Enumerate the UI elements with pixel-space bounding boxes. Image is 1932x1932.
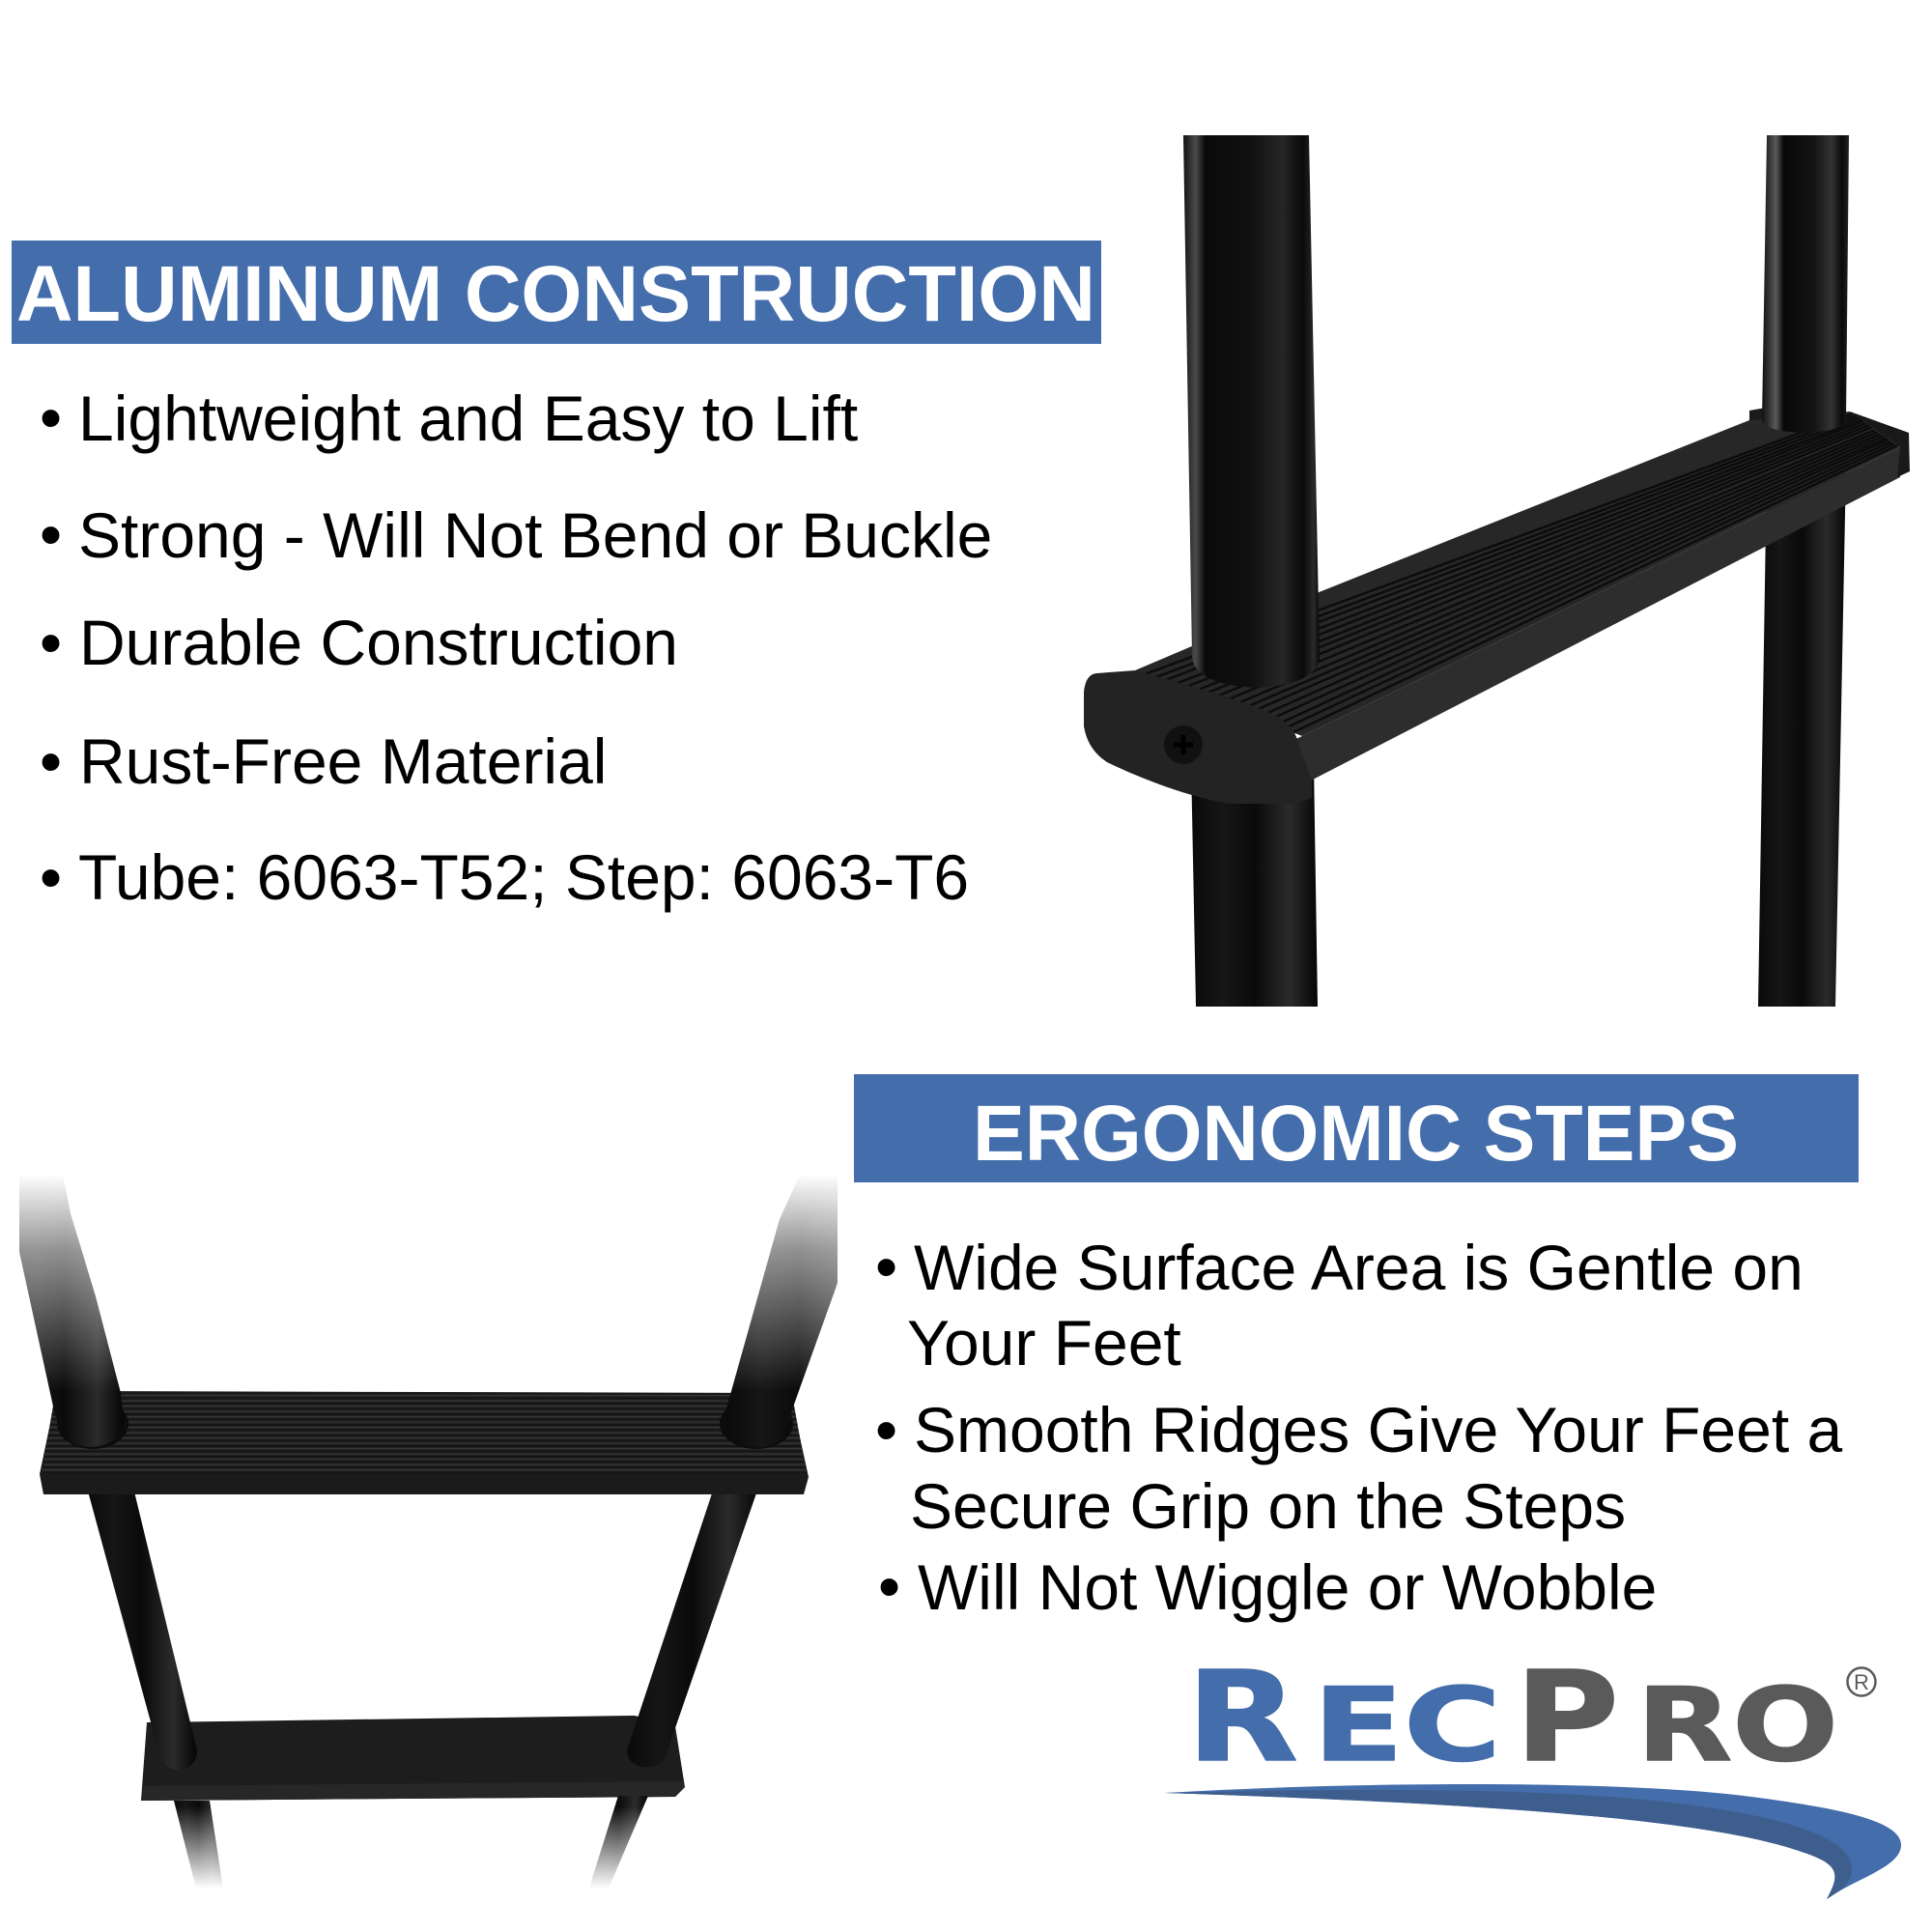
bullet list: aluminum features (40, 382, 992, 913)
registered mark (1847, 1667, 1876, 1696)
bullet list: step features: Will Not Wiggle or Wobble (918, 1551, 1657, 1623)
step tread (1135, 408, 1910, 787)
lower step (141, 1716, 685, 1801)
heading: ergonomic steps (854, 1074, 1859, 1182)
bullet list: aluminum features: • (40, 841, 62, 913)
upper left tube (1183, 135, 1320, 688)
heading: ergonomic steps: ERGONOMIC STEPS (973, 1090, 1739, 1178)
logo wordmark: R (1186, 1645, 1298, 1790)
panel: ergonomic steps (854, 1074, 1859, 1623)
logo swoosh (1165, 1784, 1901, 1899)
panel: aluminum construction (12, 241, 1101, 913)
bullet list: step features: • (878, 1550, 900, 1622)
bullet list: aluminum features: Strong - Will Not Bend or Buckle (78, 499, 992, 571)
bullet list: step features: Your Feet (907, 1307, 1181, 1378)
bullet list: step features: • (875, 1394, 897, 1465)
bullet list: aluminum features: • (40, 725, 62, 797)
logo wordmark (1186, 1645, 1838, 1790)
fading upper rails (19, 1179, 838, 1447)
logo wordmark: EC (1313, 1666, 1501, 1784)
bullet list: aluminum features: Rust-Free Material (79, 725, 607, 797)
bullet list: step features (875, 1231, 1843, 1623)
logo wordmark: RO (1636, 1666, 1838, 1784)
logo wordmark: P (1515, 1645, 1619, 1790)
bullet list: aluminum features: Tube: 6063-T52; Step: 6063-T6 (78, 841, 969, 913)
upper right tube (1762, 135, 1849, 433)
heading: aluminum construction: ALUMINUM CONSTRUCTION (16, 250, 1095, 338)
upper step (40, 1391, 809, 1494)
bullet list: step features: Wide Surface Area is Gentle on (914, 1232, 1804, 1303)
lower left rail (87, 1488, 197, 1770)
end cap with screw (1084, 670, 1312, 804)
logo: RecPro (1165, 1645, 1901, 1899)
bullet list: step features: • (875, 1231, 897, 1302)
photo: ladder step close-up (1084, 135, 1910, 1007)
fading lower rails (174, 1796, 648, 1890)
bullet list: aluminum features: Durable Construction (79, 607, 678, 678)
bullet list: step features: Secure Grip on the Steps (910, 1470, 1626, 1542)
bullet list: step features: Smooth Ridges Give Your Feet a (914, 1394, 1843, 1465)
lower right tube (1758, 464, 1846, 1007)
bullet list: aluminum features: • (40, 607, 62, 678)
bullet list: aluminum features: • (40, 498, 62, 570)
bullet list: aluminum features: • (40, 382, 62, 453)
lower left tube (1191, 763, 1318, 1007)
lower right rail (627, 1488, 758, 1767)
bullet list: aluminum features: Lightweight and Easy to Lift (78, 383, 858, 454)
photo: ladder front view (19, 1179, 838, 1886)
registered mark: R (1854, 1670, 1869, 1694)
